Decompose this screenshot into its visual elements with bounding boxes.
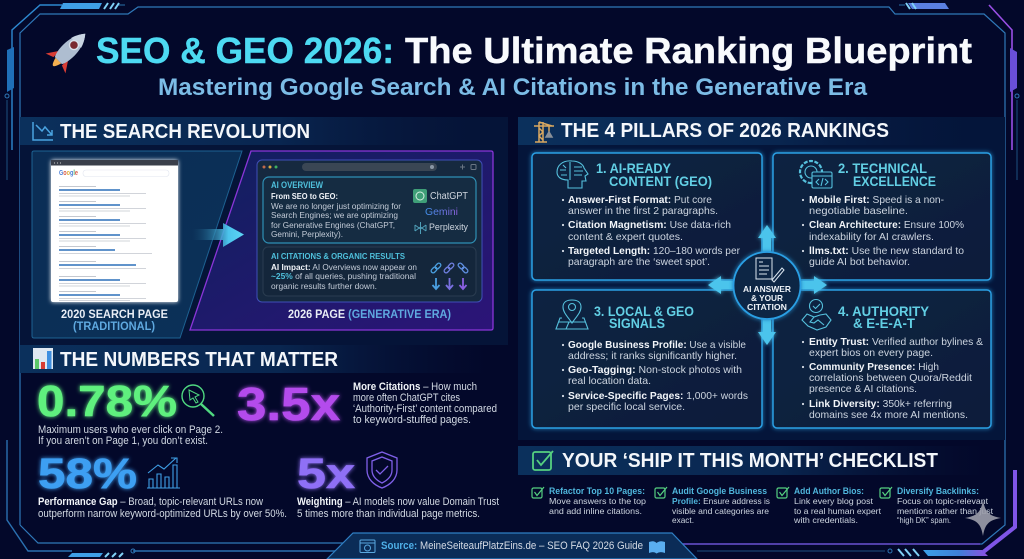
description xyxy=(38,496,287,520)
hub label xyxy=(743,284,791,312)
heading: THE SEARCH REVOLUTION xyxy=(60,121,310,143)
label: Perplexity: Perplexity xyxy=(429,222,468,233)
checklist item 3: with credentials. xyxy=(793,515,858,525)
bullet list: domains see 4x more AI mentions. xyxy=(809,409,968,421)
pillar title: 2. TECHNICAL xyxy=(838,160,927,176)
panel: the search revolution xyxy=(20,117,508,345)
caption: 2020 SEARCH PAGE xyxy=(61,307,168,321)
description: Performance Gap – Broad, topic-relevant URLs now xyxy=(38,496,263,508)
checklist item 2: Audit Google Business xyxy=(672,486,767,496)
AI overview box: AI OVERVIEW xyxy=(271,180,323,190)
pillar title: & E-E-A-T xyxy=(853,315,915,331)
checklist item 4 xyxy=(880,486,994,525)
bullet list: presence & AI citations. xyxy=(809,383,917,395)
icon: shield check xyxy=(367,452,397,488)
bullet list: Citation Magnetism: Use data-rich xyxy=(568,219,731,231)
icon: sparkle watermark xyxy=(965,500,1001,536)
icon: gear and code window xyxy=(800,161,832,188)
footer: source bar xyxy=(327,533,697,559)
title text: SEO & GEO 2026: xyxy=(96,30,394,71)
stat: 0.78% xyxy=(37,377,223,447)
heading band xyxy=(518,117,988,145)
description xyxy=(353,381,497,426)
bullet list xyxy=(803,194,964,268)
description: more often ChatGPT cites xyxy=(353,392,460,404)
checklist item 2: Profile: Ensure address is xyxy=(672,496,770,506)
arrows: four directions xyxy=(708,225,827,345)
icon: bar chart xyxy=(33,348,53,369)
description: 5 times more than individual page metrics. xyxy=(297,508,480,520)
description: Maximum users who ever click on Page 2. xyxy=(38,424,223,436)
heading band xyxy=(20,117,490,145)
stat: 58% xyxy=(38,450,287,520)
icon: handshake xyxy=(802,300,831,330)
stat: 3.5x: 3.5x xyxy=(237,378,340,430)
description: ‘Authority-First’ content compared xyxy=(353,403,497,415)
heading: THE NUMBERS THAT MATTER xyxy=(60,349,339,371)
subtitle: Mastering Google Search & AI Citations in the Generative Era xyxy=(158,74,868,101)
hub label: & YOUR xyxy=(751,293,783,303)
pillar title: 3. LOCAL & GEO xyxy=(594,303,694,319)
description xyxy=(297,496,499,520)
bullet list: Service-Specific Pages: 1,000+ words xyxy=(568,390,748,402)
panel: 2026 generative page xyxy=(190,151,493,330)
google page mock xyxy=(51,160,178,302)
bullet list: per specific local service. xyxy=(568,401,685,413)
AI citations box: organic results further down. xyxy=(271,281,377,291)
description: If you aren’t on Page 1, you don’t exist. xyxy=(38,435,208,447)
heading: THE 4 PILLARS OF 2026 RANKINGS xyxy=(561,120,889,142)
panel: checklist xyxy=(518,446,994,525)
hub label: AI ANSWER xyxy=(743,284,791,294)
pillar title: CONTENT (GEO) xyxy=(609,173,712,189)
bullet list: guide AI bot behavior. xyxy=(809,256,910,268)
panel: the numbers that matter xyxy=(20,345,499,520)
icon: growth chart xyxy=(147,458,180,488)
stat: 5x: 5x xyxy=(297,450,355,498)
bullet list: Entity Trust: Verified author bylines & xyxy=(809,336,983,348)
AI overview box: We are no longer just optimizing for xyxy=(271,201,401,211)
bullet list: correlations between Quora/Reddit xyxy=(809,372,972,384)
icon: open book xyxy=(649,541,665,554)
bullet list: Community Presence: High xyxy=(809,361,939,373)
bullet list: Answer-First Format: Put core xyxy=(568,194,712,206)
AI citations box xyxy=(263,247,476,296)
bullet list: Targeted Length: 120–180 words per xyxy=(568,245,740,257)
description: Weighting – AI models now value Domain Trust xyxy=(297,496,499,508)
AI citations box: ~25% of all queries, pushing traditional xyxy=(271,271,416,281)
checklist item 4: “high DK” spam. xyxy=(897,515,951,525)
bullet list: Mobile First: Speed is a non- xyxy=(809,194,944,206)
AI overview box: Search Engines; we are optimizing xyxy=(271,210,398,220)
AI citations box: AI CITATIONS & ORGANIC RESULTS xyxy=(271,251,405,261)
checklist item 3: Link every blog post xyxy=(794,496,874,506)
AI overview box: Gemini, Perplexity). xyxy=(271,229,343,239)
icon: links and down arrows xyxy=(430,262,469,289)
checklist item 2: exact. xyxy=(672,515,694,525)
checklist item 2 xyxy=(655,486,770,525)
bullet list: Google Business Profile: Use a visible xyxy=(568,339,746,351)
title xyxy=(43,24,972,76)
icon: crane xyxy=(534,122,554,142)
caption: 2026 PAGE (GENERATIVE ERA) xyxy=(288,307,451,321)
icon: map pin xyxy=(556,300,588,329)
checklist item 1: Refactor Top 10 Pages: xyxy=(549,486,645,496)
bullet list: negotiable baseline. xyxy=(809,205,908,217)
heading band xyxy=(518,446,988,475)
stat: 58%: 58% xyxy=(38,450,137,498)
pillar title: 4. AUTHORITY xyxy=(838,303,930,319)
panel: the 4 pillars xyxy=(518,117,1005,440)
checklist item 4: mentions rather than just xyxy=(897,506,994,516)
pillar title: 1. AI-READY xyxy=(596,160,672,176)
card: 3 local and geo signals xyxy=(532,290,762,428)
bullet list: real location data. xyxy=(568,375,651,387)
bullet list: llms.txt: Use the new standard to xyxy=(809,245,964,257)
source text: Source: MeineSeiteaufPlatzEins.de – SEO FAQ 2026 Guide xyxy=(381,540,643,552)
icon: rocket xyxy=(43,24,95,76)
bullet list: expert bios on every page. xyxy=(809,347,933,359)
icon: ChatGPT xyxy=(413,189,427,203)
checklist item 3: to a real human expert xyxy=(794,506,882,516)
bullet list: paragraph are the ‘sweet spot’. xyxy=(568,256,710,268)
icon: Perplexity xyxy=(415,222,426,234)
panel: 2020 traditional page xyxy=(32,151,242,338)
bullet list: Geo-Tagging: Non-stock photos with xyxy=(568,364,742,376)
icon: document and pen xyxy=(756,258,784,282)
browser window xyxy=(257,160,482,302)
checklist item 3 xyxy=(777,486,882,525)
bullet list: Clean Architecture: Ensure 100% xyxy=(809,219,964,231)
title: The Ultimate Ranking Blueprint xyxy=(405,30,972,71)
bullet list: Link Diversity: 350k+ referring xyxy=(809,398,952,410)
stat: 3.5x xyxy=(237,378,497,430)
description: More Citations – How much xyxy=(353,381,477,393)
checklist item 4: Focus on topic-relevant xyxy=(897,496,989,506)
icon: checkbox xyxy=(533,451,553,470)
center hub with arrows xyxy=(708,225,827,345)
checklist item 1: and add inline citations. xyxy=(549,506,642,516)
checklist item 1 xyxy=(532,486,646,516)
description: to keyword-stuffed pages. xyxy=(353,414,471,426)
AI citations box: AI Impact: AI Overviews now appear on xyxy=(271,262,417,272)
heading: YOUR ‘SHIP IT THIS MONTH’ CHECKLIST xyxy=(562,450,938,472)
pillar title: EXCELLENCE xyxy=(853,173,936,189)
heading band xyxy=(20,345,490,373)
AI overview box: for Generative Engines (ChatGPT, xyxy=(271,220,395,230)
card: 4 authority and E-E-A-T xyxy=(773,290,991,428)
icon: trend down xyxy=(33,122,53,140)
card: 2 technical excellence xyxy=(773,153,991,280)
description: outperform narrow keyword-optimized URLs by over 50%. xyxy=(38,508,287,520)
AI overview box: From SEO to GEO: xyxy=(271,191,338,201)
stat: 5x xyxy=(297,450,499,520)
arrow: 2020 to 2026 xyxy=(192,223,244,247)
bullet list xyxy=(803,336,983,421)
bullet list xyxy=(563,194,740,268)
bullet list: content & expert quotes. xyxy=(568,231,683,243)
bullet list: address; it ranks significantly higher. xyxy=(568,350,737,362)
google logo: Google xyxy=(59,170,78,177)
caption accent: (TRADITIONAL) xyxy=(73,319,155,333)
bullet list: indexability for AI crawlers. xyxy=(809,231,934,243)
bullet list xyxy=(563,339,748,413)
hub circle xyxy=(734,252,800,319)
checklist item 4: Diversify Backlinks: xyxy=(897,486,979,496)
icon: magnifier cursor xyxy=(182,385,214,416)
hub label: CITATION xyxy=(747,302,787,312)
card: 1 AI-ready content xyxy=(532,153,762,280)
label: ChatGPT: ChatGPT xyxy=(430,191,468,202)
bullet list: answer in the first 2 paragraphs. xyxy=(568,205,718,217)
checklist item 2: visible and categories are xyxy=(672,506,769,516)
checklist item 1: Move answers to the top xyxy=(549,496,646,506)
label: Gemini: Gemini xyxy=(425,206,458,218)
icon: brain document xyxy=(557,161,588,188)
pillar title: SIGNALS xyxy=(609,315,665,331)
icon: browser globe xyxy=(360,540,375,552)
AI overview box xyxy=(263,177,476,243)
stat: 0.78%: 0.78% xyxy=(37,377,177,426)
checklist item 3: Add Author Bios: xyxy=(794,486,864,496)
